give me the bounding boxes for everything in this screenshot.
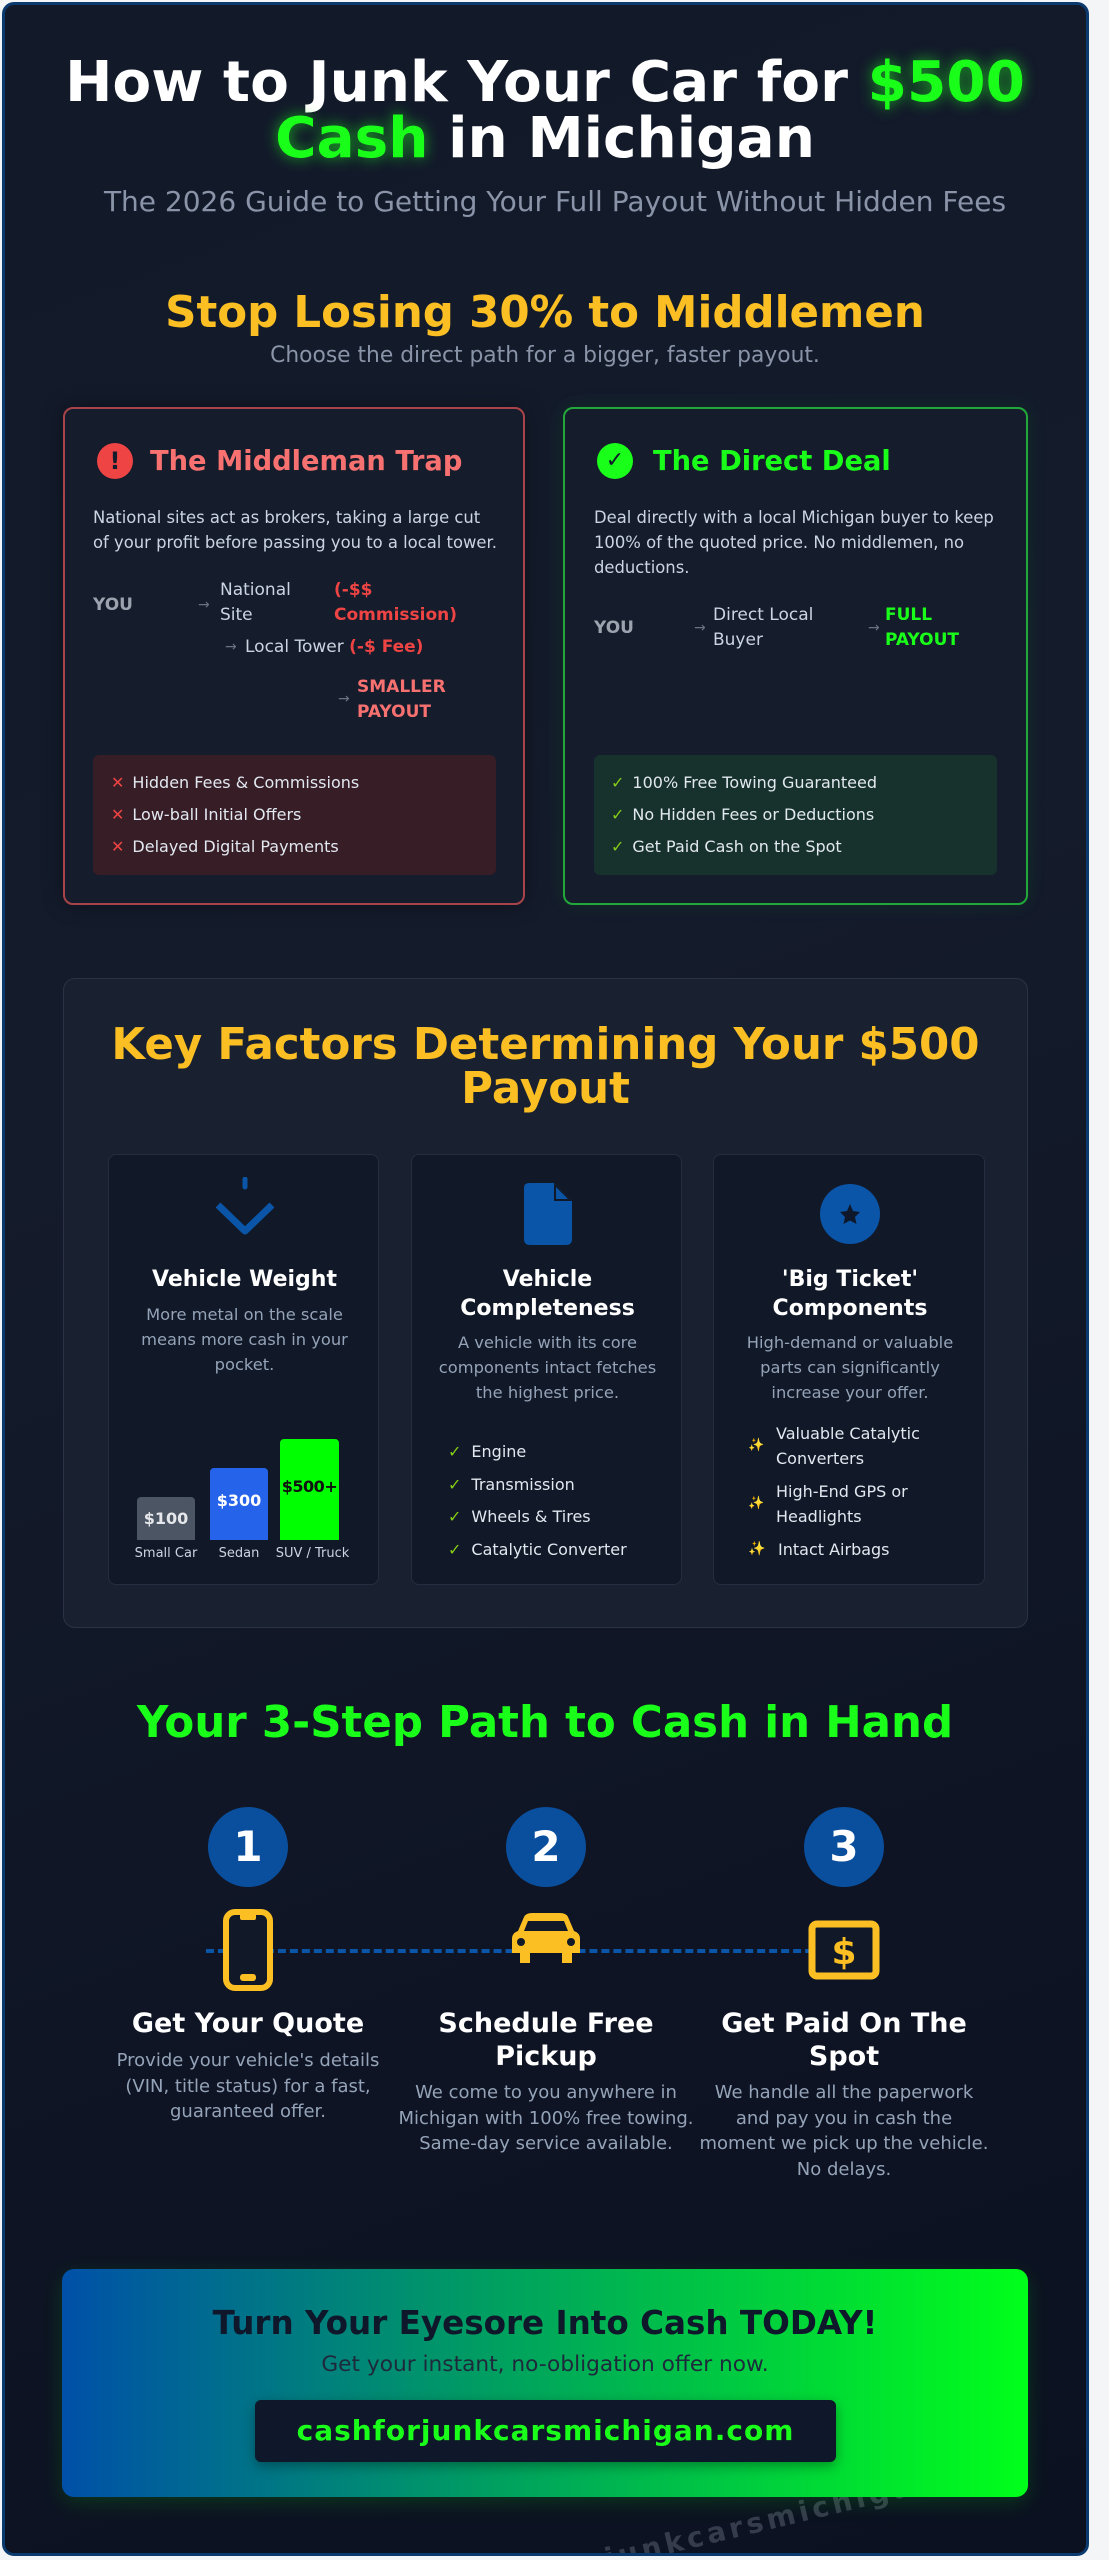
number badge [208,1807,288,1887]
flow diagram: YOU [594,618,634,638]
dashed connector [206,1949,873,1953]
list: components: ✨ [748,1496,764,1511]
icon: phone [223,1909,273,1991]
flow diagram: Commission) [334,605,457,625]
flow diagram: → [338,691,350,707]
CTA subtitle: Get your instant, no-obligation offer now. [321,2352,769,2377]
card title [460,1267,635,1321]
card title: The Direct Deal [653,446,891,477]
list: components: ✨ [748,1541,765,1557]
flow diagram [92,580,457,722]
step text: Provide your vehicle's details (VIN, title status) for a fast, guaranteed offer. [117,2050,379,2122]
panel: middleman trap: PAYOUT [357,702,431,722]
number badge: 1 [233,1822,263,1871]
step title: Pickup [495,2041,597,2072]
checklist [448,1442,627,1558]
flow diagram: → [868,620,880,636]
flow diagram: Site [220,605,253,625]
flow diagram: YOU [93,595,133,615]
list: negatives [93,755,496,875]
icon: cash [808,1920,880,1980]
card: vehicle weight [108,1154,379,1585]
heading [111,1020,980,1114]
list: components: Intact Airbags [778,1540,890,1559]
icon: warning [97,443,133,479]
title: Cash in Michigan [275,106,815,171]
list: components [748,1424,920,1559]
card: big ticket [713,1154,985,1585]
card: completeness [411,1154,682,1585]
heading: stop losing: Stop Losing 30% to Middlemen [165,288,925,338]
panel: middleman trap [63,407,525,905]
list: components: Converters [776,1449,864,1468]
flow diagram: → [225,639,237,655]
card title: Completeness [460,1296,635,1321]
panel: key factors [63,978,1028,1628]
description [93,508,497,552]
panel: direct deal [563,407,1028,905]
description: 100% of the quoted price. No middlemen, no [594,533,964,552]
flow diagram: SMALLER [357,677,446,697]
step 3 [700,1807,988,2180]
bar chart: $300 [217,1491,261,1510]
checklist: ✓ Wheels & Tires [448,1507,591,1526]
bar chart: Small Car [135,1546,197,1561]
checklist: ✓ Catalytic Converter [448,1540,627,1558]
step text: We come to you anywhere in Michigan with 100% free towing. Same-day service available. [398,2082,694,2154]
flow diagram: Direct Local [713,605,813,625]
list: components: High-End GPS or [776,1482,908,1501]
card title: Vehicle [503,1267,592,1292]
description: Deal directly with a local Michigan buyer to keep [594,508,994,527]
icon: cash: $ [831,1932,857,1973]
heading: Key Factors Determining Your $500 [111,1020,980,1070]
icon: car [512,1913,580,1963]
icon: star badge [820,1184,880,1244]
card title [773,1267,927,1321]
list: negatives: ✕ Hidden Fees & Commissions [111,773,359,792]
flow diagram: National [220,580,291,600]
bar chart [135,1439,350,1561]
list: components: ✨ [748,1438,764,1453]
step text: We handle all the paperwork and pay you in cash the moment we pick up the vehicle. No delays. [700,2082,988,2180]
step title: Schedule Free [438,2008,654,2039]
flow diagram: (-$$ [334,580,372,600]
step title: Get Your Quote [132,2008,364,2039]
list: positives: ✓ Get Paid Cash on the Spot [611,837,842,856]
step title: Spot [809,2041,879,2072]
icon: document [524,1183,572,1245]
title: How to Junk Your Car for $500 [65,50,1025,115]
number badge: 3 [829,1822,859,1871]
flow diagram: Local Tower (-$ Fee) [245,637,423,657]
card title: Components [773,1296,927,1321]
description: High-demand or valuable parts can significantly increase your offer. [747,1333,953,1402]
list: negatives: ✕ Low-ball Initial Offers [111,805,301,824]
step title: Get Paid On The [721,2008,967,2039]
list: negatives: ✕ Delayed Digital Payments [111,837,339,856]
step 1 [117,1807,379,2122]
flow diagram: → [694,620,706,636]
flow diagram: → [198,597,210,613]
flow diagram: Buyer [713,630,763,650]
CTA button: url: cashforjunkcarsmichigan.com [297,2414,794,2447]
heading: Payout [461,1064,630,1114]
list: positives [594,755,997,875]
checklist: ✓ Engine [448,1442,526,1461]
number badge [506,1807,586,1887]
flow diagram: FULL [885,605,932,625]
flow diagram [594,605,959,650]
description: deductions. [594,558,689,577]
card title: Vehicle Weight [152,1267,337,1292]
card title: 'Big Ticket' [782,1267,918,1292]
subtitle: The 2026 Guide to Getting Your Full Payout Without Hidden Fees [104,185,1006,218]
CTA button: url [255,2400,836,2462]
icon: warning: ! [110,447,120,475]
bar chart: SUV / Truck [276,1546,349,1561]
description: National sites act as brokers, taking a large cut [93,508,480,527]
CTA banner [62,2269,1028,2497]
list: components: Valuable Catalytic [776,1424,920,1443]
card title: The Middleman Trap [150,446,462,477]
bar chart: Sedan [219,1546,259,1561]
description: A vehicle with its core components intact fetches the highest price. [439,1333,656,1402]
list: positives: ✓ No Hidden Fees or Deductions [611,805,874,824]
subheading: Choose the direct path for a bigger, faster payout. [270,343,820,368]
icon: check [597,443,633,479]
step title [721,2008,967,2072]
flow diagram: PAYOUT [885,630,959,650]
bar chart: $500+ [282,1477,337,1496]
step title [438,2008,654,2072]
bar chart: $100 [144,1509,188,1528]
description: of your profit before passing you to a local tower. [93,533,497,552]
heading: 3 steps: Your 3-Step Path to Cash in Hand [137,1698,953,1748]
description: More metal on the scale means more cash in your pocket. [141,1305,348,1374]
title [65,50,1032,171]
number badge: 2 [531,1822,561,1871]
icon: down arrow [216,1177,274,1234]
list: positives: ✓ 100% Free Towing Guaranteed [611,773,877,792]
description [594,508,994,577]
number badge [804,1807,884,1887]
step 2 [398,1807,694,2154]
icon: check: ✓ [606,448,624,473]
list: components: Headlights [776,1507,862,1526]
CTA title: Turn Your Eyesore Into Cash TODAY! [213,2304,877,2342]
checklist: ✓ Transmission [448,1474,575,1494]
